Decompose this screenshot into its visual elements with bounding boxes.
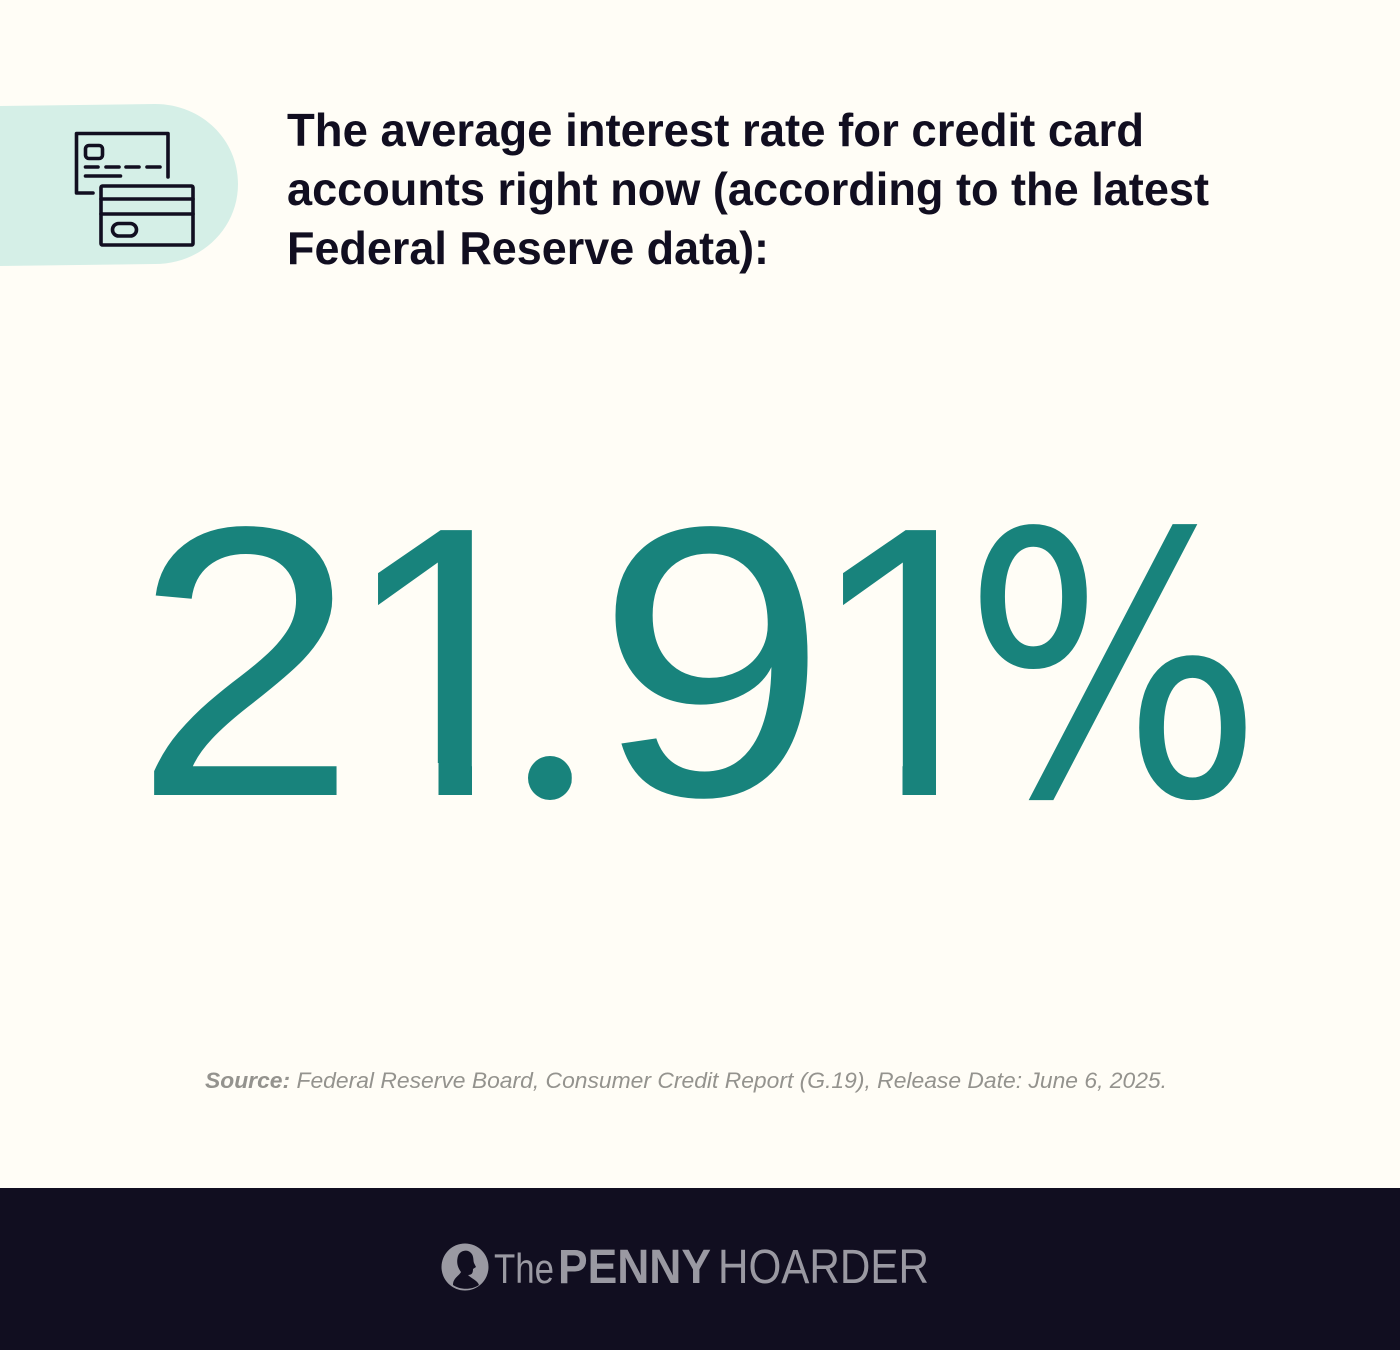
- footer logo: The Penny Hoarder: HOARDER: [718, 1241, 929, 1294]
- big statistic: 21.91%: [154, 524, 1246, 800]
- heading: accounts right now (according to the latest: [287, 163, 1209, 215]
- logo icon: coin with silhouette: [442, 1244, 488, 1290]
- heading: Federal Reserve data):: [287, 222, 769, 274]
- big statistic: 21.91%: .: [482, 402, 616, 897]
- source note: Source: Federal Reserve Board, Consumer Credit Report (G.19), Release Date: June 6, 2025.: [205, 1068, 1167, 1093]
- heading: [287, 104, 1209, 274]
- logo wordmark: The: [494, 1245, 554, 1292]
- badge background: [0, 104, 238, 266]
- footer logo: The Penny Hoarder: [442, 1241, 929, 1294]
- big statistic: 21.91%: 2: [134, 447, 357, 877]
- icon: credit cards: [76, 134, 193, 245]
- icon badge with credit cards: [0, 104, 238, 266]
- heading: The average interest rate for credit card: [287, 104, 1144, 156]
- footer band: [0, 1188, 1400, 1350]
- big statistic: 21.91%: %: [963, 457, 1263, 882]
- big statistic: 21.91%: 1: [341, 446, 555, 877]
- big statistic: 21.91%: 1: [806, 446, 1020, 877]
- big statistic: 21.91%: 9: [596, 446, 827, 877]
- footer logo: The Penny Hoarder: PENNY: [558, 1241, 711, 1294]
